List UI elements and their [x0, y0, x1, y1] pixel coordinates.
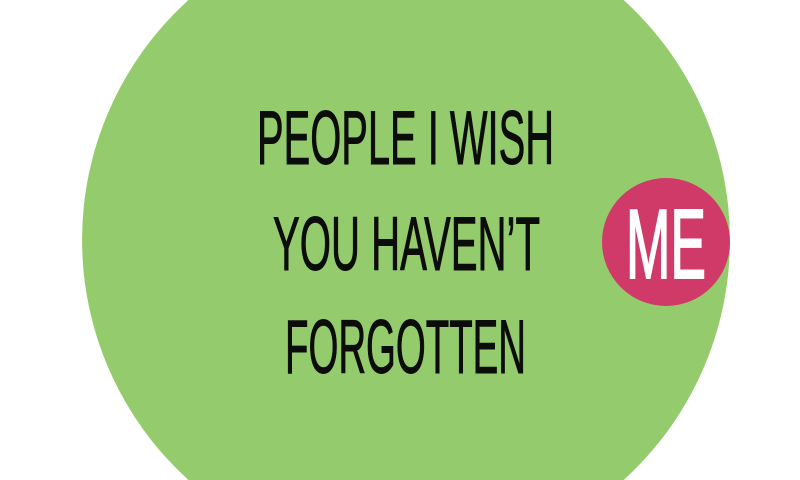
- line 2: YOU HAVEN’T: [273, 202, 540, 287]
- heading text: [257, 96, 554, 390]
- ME label: ME: [626, 189, 706, 299]
- pink ME circle: [602, 178, 730, 306]
- line 3: FORGOTTEN: [285, 305, 526, 390]
